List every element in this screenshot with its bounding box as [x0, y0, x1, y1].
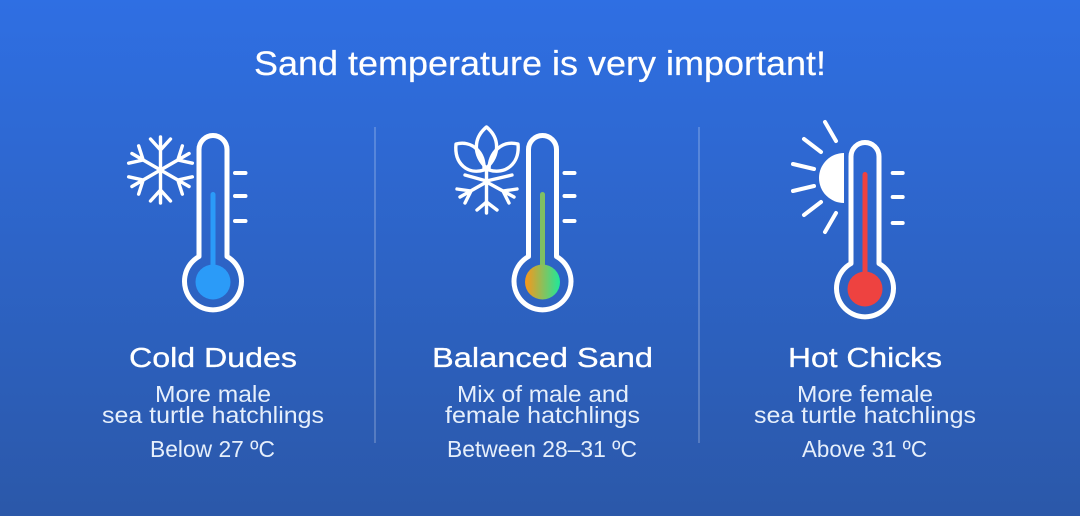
description: [445, 381, 640, 428]
title: Sand temperature is very important!: [254, 45, 826, 83]
icon: cold thermometer: [184, 136, 246, 310]
description: More female: [797, 381, 933, 407]
description: sea turtle hatchlings: [102, 402, 324, 428]
panel: hot chicks: [754, 122, 976, 462]
icon: hot thermometer: [836, 142, 903, 317]
heading: Balanced Sand: [432, 342, 653, 373]
temperature range: Below 27 ºC: [150, 436, 275, 462]
heading: Hot Chicks: [788, 342, 942, 373]
description: female hatchlings: [445, 402, 640, 428]
panel: balanced sand: [432, 127, 653, 462]
icon: balanced thermometer: [514, 136, 574, 310]
description: [754, 381, 976, 428]
icon: snowflake: [127, 137, 194, 203]
heading: Cold Dudes: [129, 342, 297, 373]
panel: cold dudes: [102, 136, 324, 462]
icon: sun: [793, 122, 844, 232]
description: sea turtle hatchlings: [754, 402, 976, 428]
temperature range: Above 31 ºC: [802, 436, 927, 462]
icon: leaves and snowflake: [456, 127, 518, 213]
description: Mix of male and: [457, 381, 629, 407]
description: More male: [155, 381, 271, 407]
temperature range: Between 28–31 ºC: [447, 436, 637, 462]
description: [102, 381, 324, 428]
